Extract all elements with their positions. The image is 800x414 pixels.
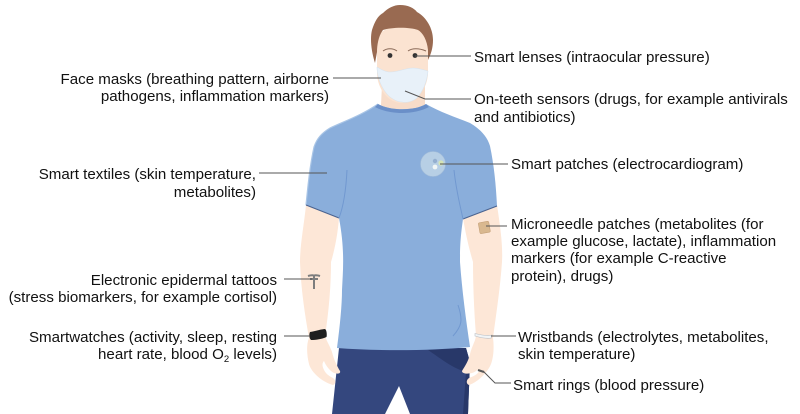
ring: [478, 370, 484, 372]
label: face masks: Face masks (breathing pattern, airborne: [61, 71, 329, 88]
collar: [375, 104, 429, 113]
left arm: [300, 205, 340, 385]
label: electronic epidermal tattoos: (stress biomarkers, for example cortisol): [9, 289, 277, 306]
label: microneedle patches: markers (for example C-reactive: [511, 250, 727, 267]
eyes: [388, 53, 417, 58]
wristband: [475, 334, 492, 338]
label: smart textiles: [39, 166, 256, 201]
label: smart textiles: metabolites): [174, 184, 256, 201]
eyebrows: [383, 49, 426, 51]
label: smartwatches: levels): [229, 346, 277, 363]
label: on-teeth sensors: On-teeth sensors (drugs, for example antivirals: [474, 91, 788, 108]
label: wristbands: skin temperature): [518, 346, 635, 363]
label: microneedle patches: example glucose, lactate), inflammation: [511, 233, 776, 250]
smartwatch: [309, 329, 327, 340]
smart patch: [420, 152, 446, 176]
label: face masks: [61, 71, 329, 105]
person figure: [300, 5, 502, 414]
shoulder highlights: [306, 104, 378, 205]
label: face masks: pathogens, inflammation markers): [101, 88, 329, 105]
neck: [381, 85, 425, 113]
label: on-teeth sensors: [474, 91, 788, 126]
label: on-teeth sensors: and antibiotics): [474, 109, 576, 126]
t-shirt: [306, 104, 497, 350]
hair: [371, 5, 433, 63]
trousers: [332, 348, 470, 414]
label: wristbands: [518, 329, 769, 363]
face mask: [377, 67, 428, 102]
label: microneedle patches: protein), drugs): [511, 268, 613, 285]
label: wristbands: Wristbands (electrolytes, metabolites,: [518, 329, 769, 346]
shirt creases: [339, 170, 463, 336]
right arm: [462, 205, 502, 385]
label: electronic epidermal tattoos: [9, 272, 277, 306]
label: smartwatches: Smartwatches (activity, sleep, resting: [29, 329, 277, 346]
tattoo: [308, 275, 320, 289]
label: smart rings: Smart rings (blood pressure): [513, 377, 704, 394]
label: electronic epidermal tattoos: Electronic epidermal tattoos: [91, 272, 277, 289]
face: [377, 26, 428, 103]
leader lines: [259, 56, 516, 383]
label: smartwatches: 2: [224, 354, 229, 365]
label: smart patches: Smart patches (electrocardiogram): [511, 156, 743, 173]
trousers shadow: [428, 348, 470, 372]
microneedle patch: [478, 221, 490, 234]
label: microneedle patches: [511, 216, 776, 285]
label: smartwatches: [29, 329, 277, 365]
label: smartwatches: heart rate, blood O: [98, 346, 224, 363]
label: smart lenses: Smart lenses (intraocular pressure): [474, 49, 710, 66]
label: smart textiles: Smart textiles (skin temperature,: [39, 166, 256, 183]
sleeve hems: [306, 205, 497, 219]
label: microneedle patches: Microneedle patches (metabolites (for: [511, 216, 764, 233]
